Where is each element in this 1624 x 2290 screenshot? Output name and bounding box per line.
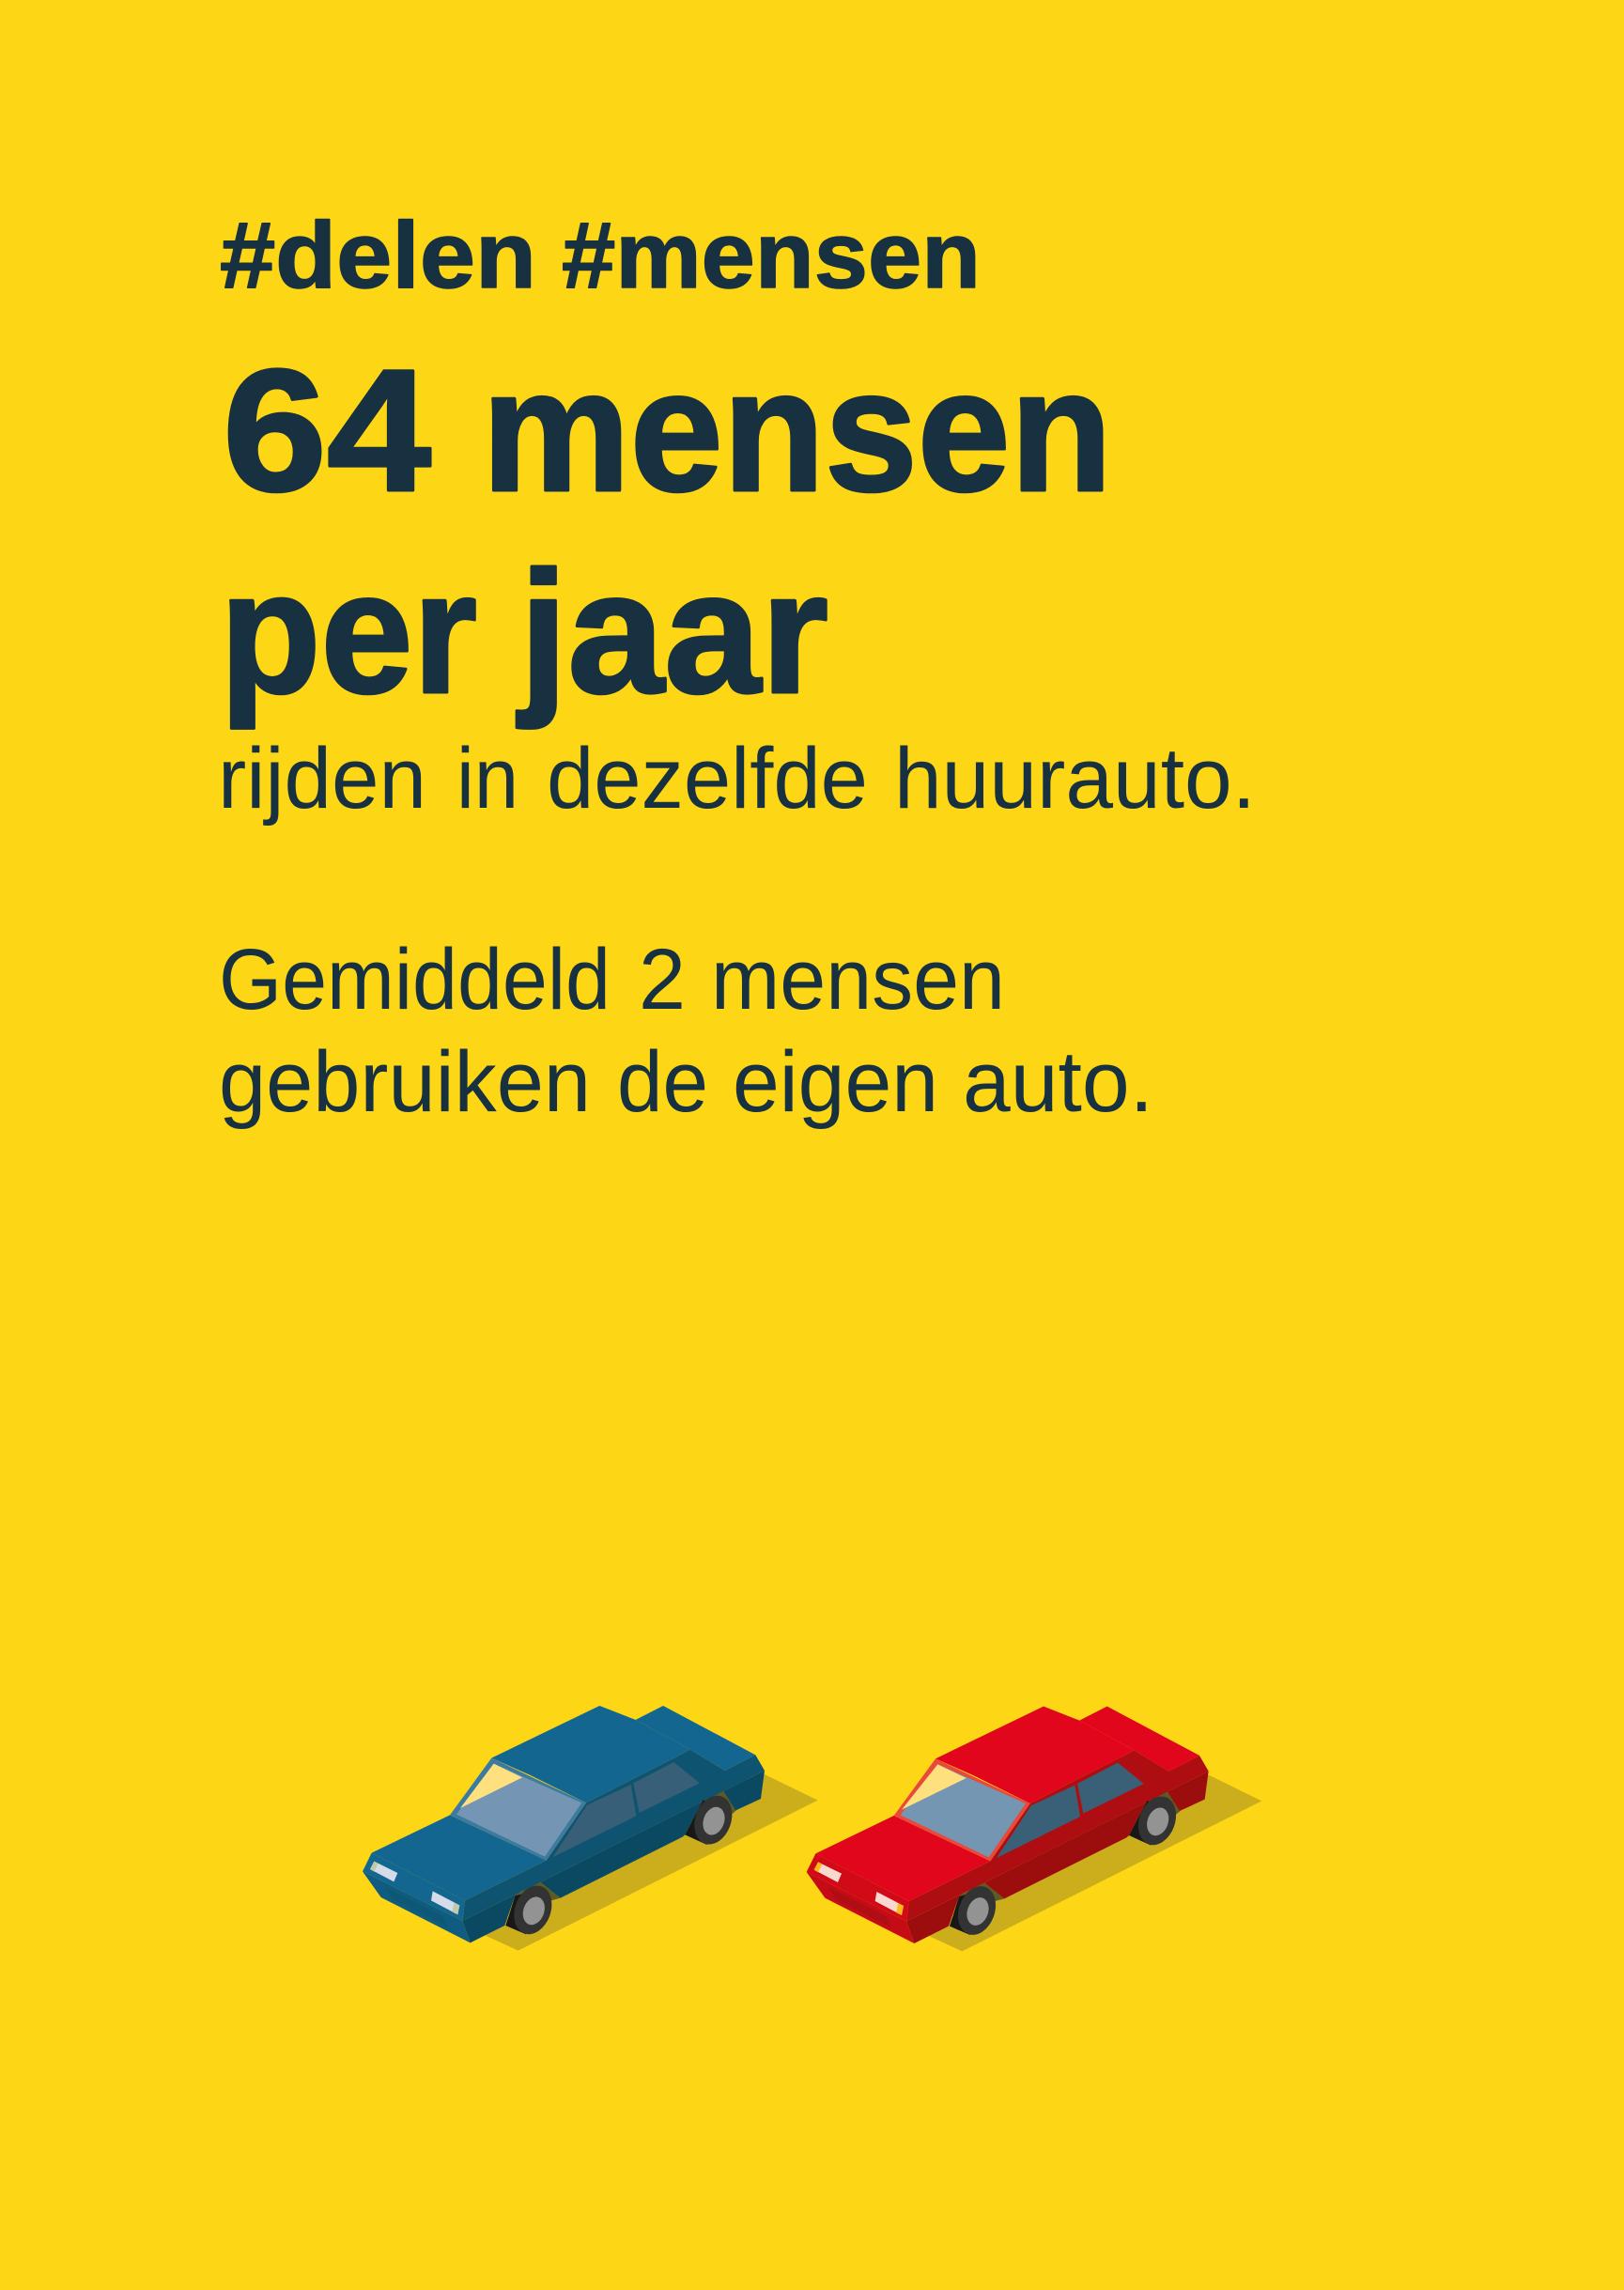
text: own car statement: eigen: [733, 1034, 938, 1130]
text: own car statement: [219, 932, 1153, 1130]
text: rental car statement: dezelfde: [547, 731, 868, 827]
main heading: jaar: [517, 536, 828, 730]
text: own car statement: gebruiken: [219, 1034, 591, 1130]
text: rental car statement: [218, 731, 1256, 827]
text: rental car statement: rijden: [218, 731, 426, 827]
text: own car statement: de: [617, 1034, 708, 1130]
hashtag heading: [220, 203, 981, 308]
main heading: [220, 334, 1112, 730]
text: own car statement: auto.: [963, 1034, 1153, 1130]
text: own car statement: mensen: [711, 932, 1005, 1028]
hashtag heading: #delen: [220, 203, 536, 308]
hashtag heading: #mensen: [562, 203, 981, 308]
main heading: mensen: [482, 334, 1112, 528]
text: rental car statement: huurauto.: [894, 731, 1256, 827]
text: own car statement: Gemiddeld: [219, 932, 611, 1028]
main heading: per: [220, 536, 477, 730]
text: rental car statement: in: [456, 731, 518, 827]
icon: blue car: [363, 1706, 818, 1951]
icon: red car: [807, 1707, 1261, 1951]
main heading: 64: [223, 334, 431, 528]
text: own car statement: 2: [639, 932, 686, 1028]
